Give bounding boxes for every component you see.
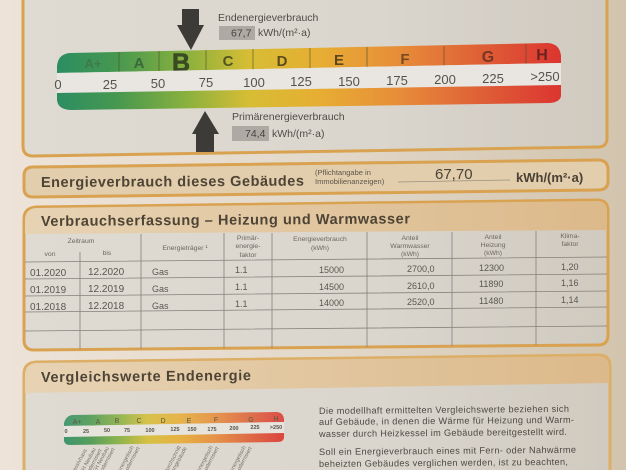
table header: faktor bbox=[240, 252, 257, 259]
white band with scale numbers: 225 bbox=[482, 71, 504, 86]
white band with scale numbers: 75 bbox=[199, 75, 213, 90]
explanatory text: wasser durch Heizkessel im Gebäude bereitgestellt wird. bbox=[318, 427, 567, 439]
white band with scale numbers: 150 bbox=[338, 74, 360, 89]
table rows: 1,16 bbox=[561, 278, 579, 288]
panel: energy scale bbox=[23, 0, 607, 156]
explanatory text: Soll ein Energieverbrauch eines mit Fern- oder Nahwärme bbox=[319, 445, 576, 457]
upper colour scale with classes: C bbox=[223, 53, 234, 70]
small colour scale: E bbox=[187, 418, 192, 425]
small colour scale: 75 bbox=[124, 428, 130, 434]
white band with scale numbers: 100 bbox=[243, 75, 265, 90]
table header: Heizung bbox=[481, 242, 506, 249]
small colour scale: 200 bbox=[229, 426, 239, 432]
small colour scale: A+ bbox=[73, 419, 81, 426]
note bbox=[315, 168, 385, 186]
upper colour scale with classes: E bbox=[334, 52, 344, 69]
table header bbox=[45, 233, 580, 259]
table header: von bbox=[45, 251, 56, 258]
explanatory text: auf Gebäude, in denen die Wärme für Heizung und Warm- bbox=[319, 415, 574, 427]
rotated benchmark labels bbox=[70, 445, 254, 470]
label: Primärenergieverbrauch: kWh/(m²·a) bbox=[272, 128, 324, 140]
table rows: 12300 bbox=[479, 263, 504, 273]
note: (Pflichtangabe in bbox=[315, 168, 371, 177]
upper colour scale with classes: B bbox=[172, 49, 190, 77]
white band with scale numbers: 175 bbox=[386, 73, 408, 88]
table rows: 1.1 bbox=[235, 299, 248, 309]
panel: comparison values bbox=[24, 355, 610, 470]
table header: Warmwasser bbox=[390, 243, 430, 250]
table rows: 01.2020 bbox=[30, 268, 67, 279]
table rows: 1.1 bbox=[235, 265, 248, 275]
table rows: 1,14 bbox=[561, 295, 579, 305]
label: Endenergieverbrauch: Endenergieverbrauch bbox=[218, 12, 319, 24]
table header: bis bbox=[103, 250, 112, 257]
table header: Klima- bbox=[560, 233, 580, 240]
table rows bbox=[30, 262, 579, 313]
heading: Verbrauchserfassung – Heizung und Warmwasser bbox=[41, 211, 410, 230]
table rows: Gas bbox=[152, 267, 169, 277]
table rows: 01.2018 bbox=[30, 302, 67, 313]
table header: (kWh) bbox=[401, 251, 419, 258]
arrow: primary energy bbox=[192, 111, 219, 152]
upper colour scale with classes bbox=[57, 43, 561, 77]
small colour scale: H bbox=[273, 416, 279, 423]
table rows: 11480 bbox=[479, 296, 503, 306]
small colour scale: D bbox=[160, 418, 166, 425]
white band with scale numbers: 125 bbox=[290, 74, 312, 89]
table rows: 12.2019 bbox=[88, 284, 125, 295]
explanatory text bbox=[318, 404, 576, 469]
label: Primärenergieverbrauch: 74,4 bbox=[245, 128, 266, 140]
table rows: 2700,0 bbox=[407, 264, 435, 274]
table header: energie- bbox=[236, 243, 260, 250]
explanatory text: Die modellhaft ermittelten Vergleichswerte beziehen sich bbox=[319, 404, 569, 416]
table rows: Gas bbox=[152, 301, 169, 311]
small colour scale: 25 bbox=[83, 429, 89, 435]
table header: faktor bbox=[562, 241, 579, 248]
upper colour scale with classes: A bbox=[134, 55, 145, 72]
upper colour scale with classes: D bbox=[277, 53, 288, 70]
arrow: final energy bbox=[177, 9, 204, 50]
table header: (kWh) bbox=[484, 250, 502, 257]
table header: Energieverbrauch bbox=[293, 236, 347, 243]
small colour scale: 100 bbox=[145, 428, 155, 434]
table rows: 01.2019 bbox=[30, 285, 67, 296]
table header: Anteil bbox=[401, 235, 419, 242]
table rows: 14500 bbox=[319, 282, 344, 292]
table header: Energieträger ¹ bbox=[162, 245, 208, 252]
small colour scale: F bbox=[214, 417, 218, 424]
small colour scale: 0 bbox=[64, 429, 68, 435]
table header: Anteil bbox=[484, 234, 502, 241]
small colour scale: A bbox=[96, 419, 101, 426]
upper colour scale with classes: G bbox=[482, 49, 494, 66]
small colour scale: 175 bbox=[207, 427, 217, 433]
label: Endenergieverbrauch bbox=[218, 12, 319, 40]
table rows: 2520,0 bbox=[407, 297, 435, 307]
table rows: 1,20 bbox=[561, 262, 579, 272]
small colour scale: G bbox=[248, 417, 254, 424]
table header: (kWh) bbox=[311, 245, 329, 252]
table rows: 2610,0 bbox=[407, 281, 435, 291]
value: 67,70 bbox=[435, 166, 473, 183]
table rows: 1.1 bbox=[235, 282, 248, 292]
small colour scale: B bbox=[115, 418, 120, 425]
panel: consumption records bbox=[24, 200, 608, 350]
white band with scale numbers: 0 bbox=[54, 77, 62, 92]
lower colour scale bbox=[57, 85, 561, 110]
label: Primärenergieverbrauch: Primärenergieverbrauch bbox=[232, 111, 345, 123]
small colour scale: C bbox=[136, 418, 142, 425]
table rows: 12.2018 bbox=[88, 301, 125, 312]
small colour scale: >250 bbox=[270, 425, 282, 431]
unit: kWh/(m²·a) bbox=[516, 170, 583, 185]
table rows: 14000 bbox=[319, 298, 344, 308]
table rows: 15000 bbox=[319, 265, 344, 275]
small colour scale: 50 bbox=[104, 428, 110, 434]
table rows: 12.2020 bbox=[88, 267, 125, 278]
white band with scale numbers bbox=[54, 63, 561, 93]
table header: Zeitraum bbox=[68, 238, 95, 245]
table rows: 11890 bbox=[479, 279, 503, 289]
white band with scale numbers: >250 bbox=[530, 69, 560, 84]
note: Immobilienanzeigen) bbox=[315, 177, 385, 186]
label: Endenergieverbrauch: kWh/(m²·a) bbox=[258, 27, 310, 39]
white band with scale numbers: 200 bbox=[434, 72, 456, 87]
table bbox=[25, 231, 607, 349]
small colour scale: 225 bbox=[250, 425, 260, 431]
upper colour scale with classes: H bbox=[536, 47, 548, 64]
value line bbox=[398, 180, 510, 182]
panel: consumption of this building bbox=[24, 160, 608, 197]
small colour scale: 125 bbox=[170, 427, 180, 433]
upper colour scale with classes: A+ bbox=[85, 56, 102, 71]
white band with scale numbers: 50 bbox=[151, 76, 165, 91]
explanatory text: beheizten Gebäudes verglichen werden, ist zu beachten, bbox=[319, 457, 568, 469]
label: Endenergieverbrauch: 67,7 bbox=[231, 28, 252, 40]
small colour scale bbox=[64, 412, 284, 445]
upper colour scale with classes: F bbox=[400, 51, 410, 68]
white band with scale numbers: 25 bbox=[103, 77, 117, 92]
heading: Energieverbrauch dieses Gebäudes bbox=[41, 174, 304, 191]
label: Primärenergieverbrauch bbox=[232, 111, 345, 141]
heading: Vergleichswerte Endenergie bbox=[41, 368, 251, 386]
small colour scale: 150 bbox=[187, 427, 197, 433]
table rows: Gas bbox=[152, 284, 169, 294]
table header: Primär- bbox=[237, 235, 259, 242]
